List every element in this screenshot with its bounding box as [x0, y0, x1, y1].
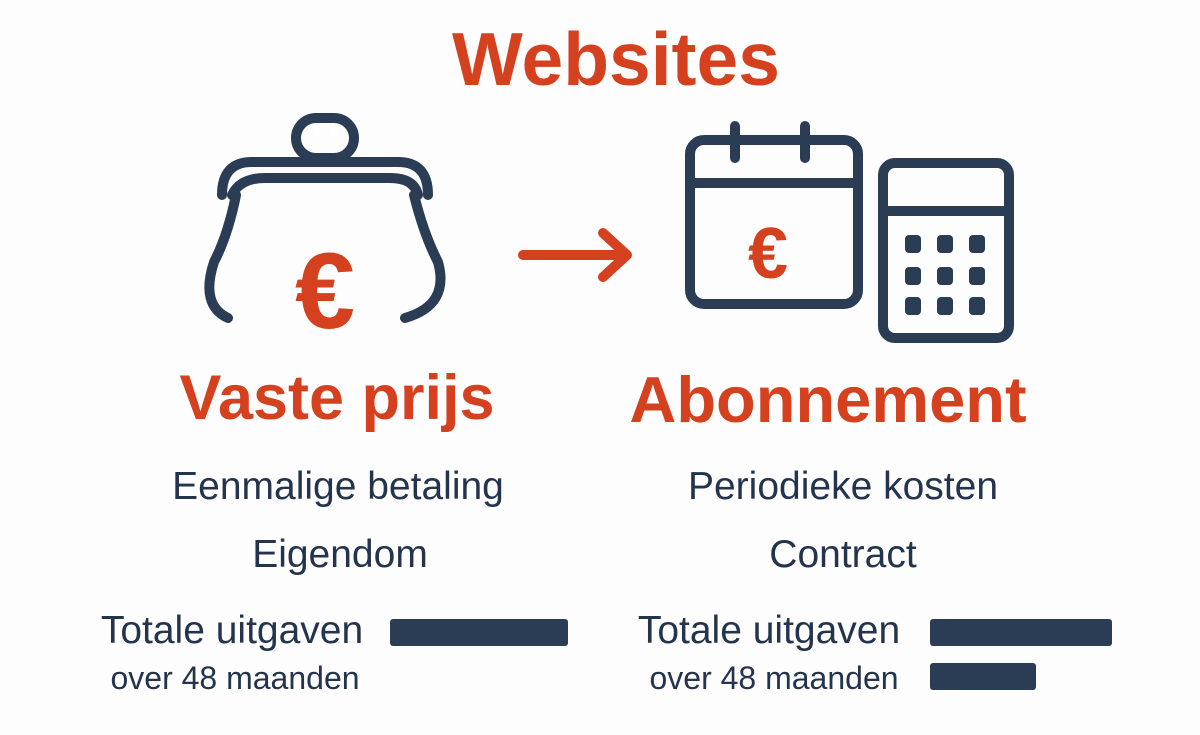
icon: calculator: [878, 158, 1014, 343]
right totals sub: over 48 maanden: [649, 660, 899, 696]
right totals label: Totale uitgaven: [638, 609, 900, 652]
icon: purse with euro: €: [295, 230, 355, 351]
text: Periodieke kosten: Periodieke kosten: [688, 465, 998, 508]
heading: Abonnement: Abonnement: [629, 363, 1027, 436]
text: Eigendom: Eigendom: [252, 533, 428, 576]
icon: calendar: [685, 121, 863, 309]
text: Contract: Contract: [769, 533, 917, 576]
text: Eenmalige betaling: Eenmalige betaling: [172, 465, 504, 508]
heading: Vaste prijs: Vaste prijs: [179, 363, 495, 433]
icon: calendar: €: [748, 214, 788, 294]
bar: subscription secondary: [930, 663, 1036, 690]
arrow: [518, 228, 632, 282]
bar: fixed total: [390, 619, 568, 646]
icon: purse with euro: [204, 113, 446, 351]
left totals sub: over 48 maanden: [110, 660, 360, 696]
left totals label: Totale uitgaven: [101, 609, 363, 652]
bar: subscription total: [930, 619, 1112, 646]
title: Websites: [452, 17, 780, 101]
